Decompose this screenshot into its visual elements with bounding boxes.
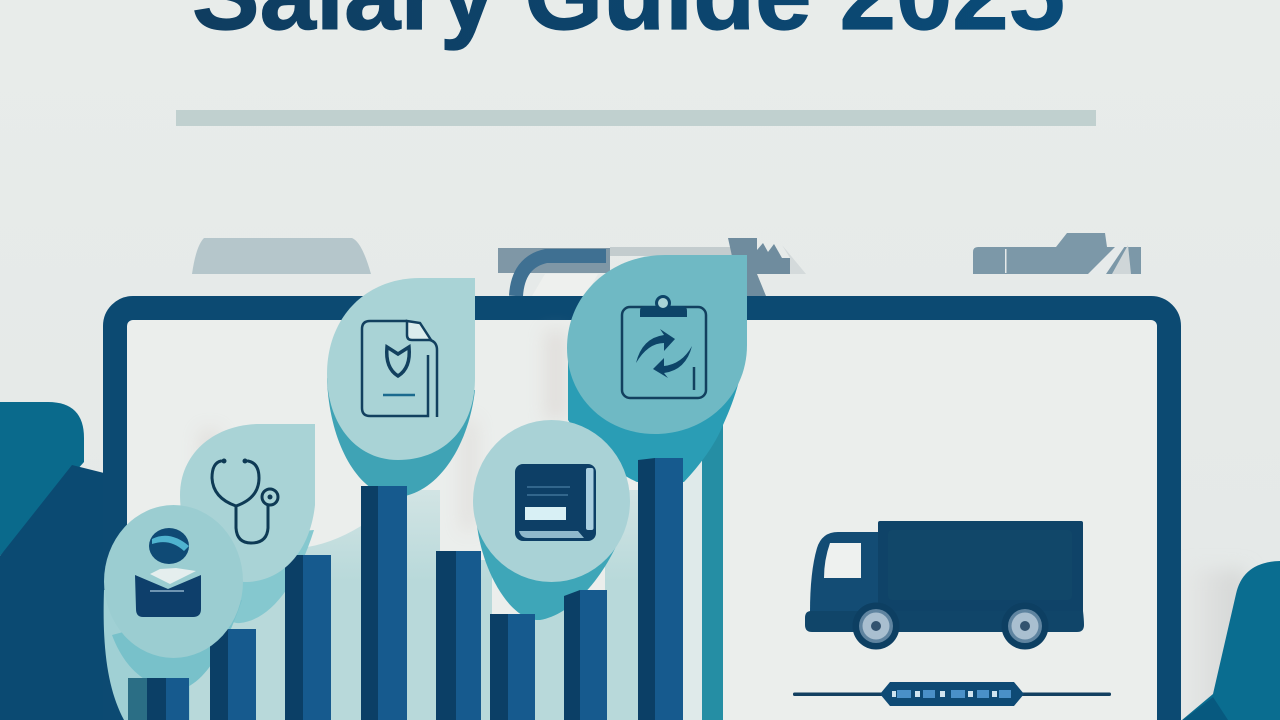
bubble: document [327, 278, 475, 460]
icon: clipboard with arrows [622, 296, 706, 398]
silhouette: centre briefcase [498, 238, 806, 296]
bar 4 [361, 486, 407, 720]
bubble shadow: stethoscope [190, 530, 314, 623]
bubble: book [473, 420, 630, 582]
bar 6 [490, 614, 535, 720]
truck front wheel [852, 602, 900, 650]
chart area [104, 255, 747, 720]
bubble: cap and envelope [104, 505, 243, 658]
icon: book [515, 464, 596, 541]
bubble shadow: book [477, 525, 625, 620]
bar 1 [128, 678, 189, 720]
bar 5 [436, 551, 481, 720]
icon: cap and envelope [135, 528, 201, 617]
monitor frame [115, 308, 1169, 720]
bars [128, 458, 683, 720]
icon: document with shield [362, 321, 437, 417]
truck cargo box [878, 521, 1083, 613]
truck illustration [805, 521, 1084, 650]
teal bar behind [702, 420, 723, 720]
silhouette: right tab [973, 233, 1141, 274]
truck cab [810, 532, 878, 612]
bar 3 [285, 555, 331, 720]
truck window [824, 543, 861, 578]
truck chassis [805, 611, 1084, 632]
bar 2 [210, 629, 256, 720]
bubble: stethoscope [180, 424, 315, 582]
bar 8 [638, 458, 683, 720]
shape: navy block [0, 465, 128, 720]
right background shape [1182, 561, 1280, 720]
truck rear wheel [1002, 602, 1048, 650]
shape: teal block [0, 402, 84, 556]
caption pill with line [793, 682, 1111, 706]
light backdrop behind bars [189, 490, 640, 720]
bar 7 [564, 590, 607, 720]
silhouette: left tab [192, 238, 371, 274]
left background shapes [0, 402, 128, 720]
icon: stethoscope [212, 458, 278, 543]
right side soft shading [1185, 570, 1245, 720]
bubble shadow: document [327, 378, 475, 497]
bubble shadow: clipboard [568, 350, 745, 482]
soft shadows behind bubbles [200, 330, 567, 530]
subtitle bar [176, 110, 1096, 126]
folder silhouettes behind the monitor [192, 233, 1141, 296]
bubble: clipboard [567, 255, 747, 434]
bubble shadow: cap [104, 590, 242, 720]
